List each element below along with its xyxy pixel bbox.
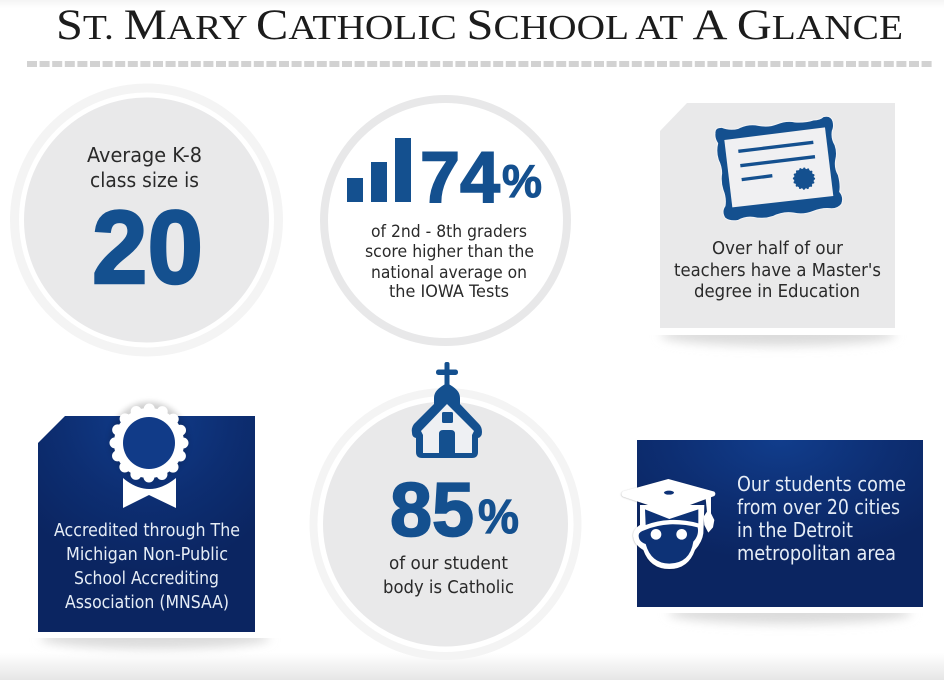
text: IOWA description: the IOWA Tests	[389, 282, 509, 302]
panel: accreditation	[38, 402, 270, 649]
text: average class size: class size is	[90, 168, 199, 192]
panel: IOWA tests circle	[324, 99, 567, 342]
text: average class size: Average K-8	[87, 143, 202, 167]
icon: award rosette	[110, 402, 188, 508]
icon: bar chart	[347, 138, 411, 202]
text: master's description: teachers have a Master's	[674, 260, 881, 281]
text: cities description: in the Detroit	[737, 518, 853, 542]
text: master's description: degree in Education	[694, 281, 860, 302]
text: catholic description: of our student	[389, 553, 508, 574]
number: 74 percent: 74	[420, 138, 500, 218]
text: cities description: from over 20 cities	[737, 495, 900, 519]
panel: student cities	[621, 440, 923, 624]
text: accreditation description: Accredited through The	[54, 520, 240, 541]
text: cities description: Our students come	[737, 472, 906, 496]
text: accreditation description: Association (MNSAA)	[65, 592, 229, 613]
text: accreditation description: Michigan Non-Public	[66, 544, 228, 565]
number: 85 percent: 85	[390, 468, 474, 553]
text: IOWA description: of 2nd - 8th graders	[371, 222, 527, 242]
number: 74 percent: %	[502, 155, 542, 207]
icon: graduate	[621, 479, 715, 569]
panel: master's degree	[660, 103, 896, 346]
panel: catholic student body circle	[314, 362, 578, 656]
text: catholic description: body is Catholic	[383, 577, 514, 598]
number: 85 percent: %	[478, 491, 519, 544]
text: IOWA description: national average on	[371, 263, 527, 283]
number: 20: 20	[92, 190, 203, 306]
text: master's description: Over half of our	[712, 238, 844, 259]
title: ST. MARY CATHOLIC SCHOOL AT A G LANCE	[56, 2, 903, 49]
text: IOWA description: score higher than the	[365, 242, 534, 262]
text: accreditation description: School Accrediting	[74, 568, 219, 589]
icon: church	[412, 362, 482, 458]
panel: class size circle	[14, 88, 278, 352]
text: cities description: metropolitan area	[737, 541, 896, 565]
icon: certificate	[715, 116, 843, 221]
